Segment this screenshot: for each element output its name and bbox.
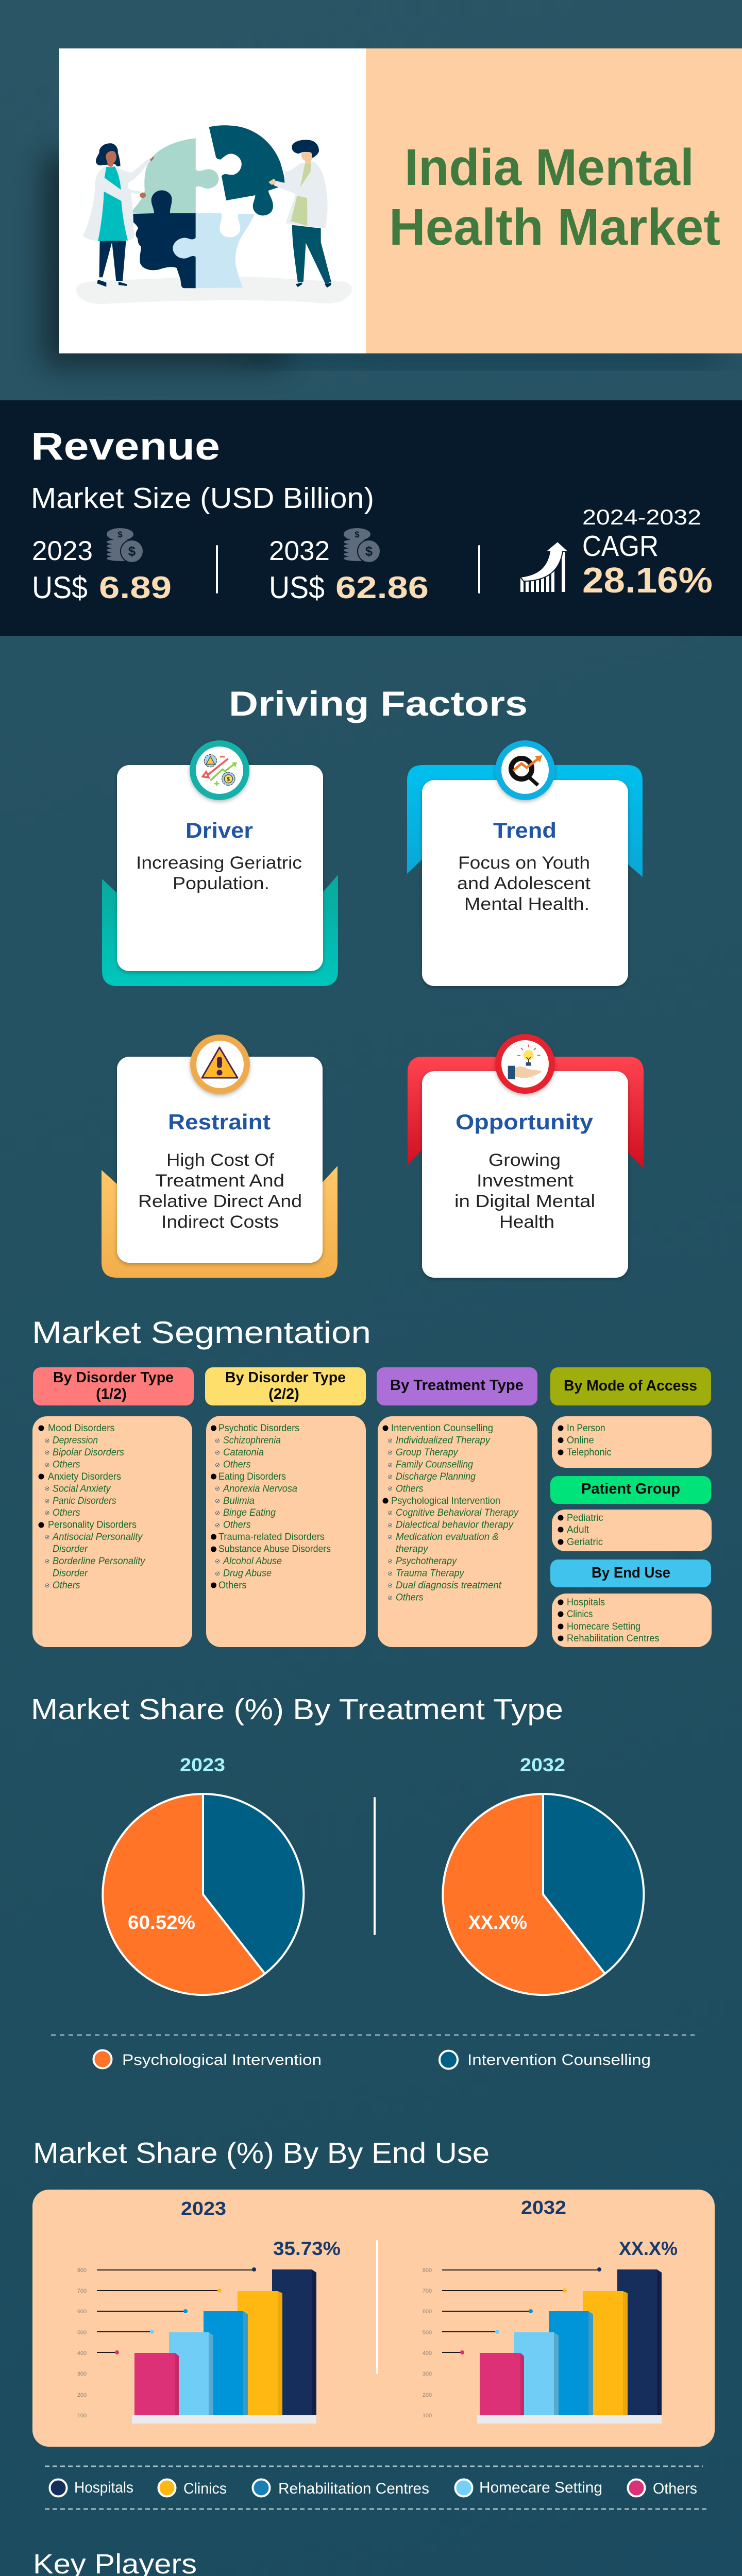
segment list [32, 1416, 192, 1647]
segment list: Others [53, 1580, 80, 1591]
bar chart: 2023: 600 [77, 2309, 87, 2315]
segment list: Pediatric [567, 1513, 603, 1523]
segment list: Adult [567, 1524, 589, 1535]
segment list: Mood Disorders [48, 1423, 114, 1434]
card text [454, 1150, 595, 1232]
segment list: Hospitals [567, 1597, 605, 1608]
bar chart: 2023: 200 [77, 2392, 87, 2398]
card text [138, 1150, 302, 1232]
segment list: Binge Eating [223, 1507, 276, 1518]
segment list: Geriatric [567, 1537, 603, 1548]
segment list [378, 1416, 537, 1647]
segment header [550, 1560, 711, 1587]
title: India Mental [404, 139, 694, 196]
segment list: Individualized Therapy [396, 1435, 491, 1446]
title [389, 139, 720, 256]
segment list [552, 1594, 712, 1647]
bar chart: 2032: 300 [423, 2371, 432, 2377]
stat: 2023 revenue: 6.89 [99, 570, 172, 605]
bar chart: 2032: 500 [423, 2330, 432, 2336]
stat: CAGR: 28.16% [582, 560, 713, 600]
bar chart: 2023: 100 [77, 2413, 87, 2419]
bar chart: 2023: 300 [77, 2371, 87, 2377]
segment list: Dual diagnosis treatment [396, 1580, 502, 1591]
panel: revenue [0, 400, 742, 636]
segment header [377, 1367, 537, 1405]
segment list: Disorder [53, 1568, 88, 1579]
segment list: Drug Abuse [223, 1568, 272, 1579]
bar chart: 2023 [77, 2198, 341, 2424]
segment header: Patient Group [581, 1481, 680, 1497]
segment list [206, 1416, 366, 1647]
heading: market share by treatment type: Market Share (%) By Treatment Type [31, 1693, 563, 1726]
segment header: (2/2) [268, 1386, 299, 1402]
illustration: people assembling a head puzzle [76, 125, 352, 304]
card text: Health [499, 1212, 554, 1232]
bar chart: 2032: 400 [423, 2350, 432, 2357]
icon: coins 2023: $ [128, 544, 136, 559]
segment list: Trauma Therapy [396, 1568, 465, 1579]
panel: patient group [550, 1476, 712, 1551]
segment list: Others [218, 1580, 246, 1591]
segment list: Cognitive Behavioral Therapy [396, 1507, 519, 1518]
card text: High Cost Of [166, 1150, 275, 1170]
stat: 2032 revenue: 62.86 [335, 570, 429, 605]
panel: driver [102, 740, 338, 986]
segment list: Discharge Planning [396, 1471, 476, 1482]
icon: coins 2023: $ [117, 530, 123, 539]
segment header [33, 1367, 194, 1405]
bar chart: 2023: 400 [77, 2350, 87, 2357]
icon: growth arrow and bars [520, 541, 569, 592]
pie chart: 2023 [103, 1754, 303, 1995]
segment list [552, 1510, 712, 1551]
segment list: Anxiety Disorders [48, 1471, 121, 1482]
card text: Investment [477, 1171, 574, 1191]
card text: Growing [488, 1150, 561, 1170]
divider [216, 545, 218, 594]
panel: opportunity [408, 1034, 644, 1278]
segment header: By Mode of Access [564, 1378, 697, 1394]
bar chart: 2032 [423, 2197, 678, 2424]
bar chart: 2032: 700 [423, 2288, 432, 2294]
stat: CAGR: 2024-2032 [582, 505, 701, 529]
panel: by disorder type 1/2 [32, 1367, 194, 1647]
segment list: Family Counselling [396, 1459, 473, 1470]
icon: driver gears and arrows [190, 740, 249, 800]
segment list: Antisocial Personality [52, 1532, 143, 1543]
stat: 2023 revenue: 2023 [32, 536, 93, 566]
stat: CAGR [582, 505, 713, 600]
segment list: Others [53, 1507, 80, 1518]
stat: 2032 revenue: 2032 [269, 536, 330, 566]
heading: market segmentation: Market Segmentation [32, 1315, 371, 1350]
segment list: Others [53, 1459, 80, 1470]
stat: 2032 revenue: US$ [269, 570, 325, 605]
bar chart: 2032: 600 [423, 2309, 432, 2315]
stat: 2023 revenue [32, 536, 172, 605]
icon: coins 2032: $ [355, 530, 360, 539]
heading: market share by end use: Market Share (%) By By End Use [33, 2137, 490, 2170]
heading: driving factors: Driving Factors [229, 684, 528, 723]
segment list: therapy [396, 1544, 429, 1555]
bar chart: 2023: 700 [77, 2288, 87, 2294]
legend: end use [49, 2479, 697, 2497]
segment header: By Treatment Type [390, 1377, 524, 1394]
segment list: In Person [567, 1423, 605, 1434]
legend: end use: Others [653, 2480, 697, 2497]
segment list: Catatonia [223, 1447, 264, 1458]
icon: warning triangle [190, 1035, 250, 1094]
pie chart: 2032: 2032 [520, 1754, 565, 1775]
segment header: By Disorder Type [225, 1369, 346, 1386]
bar chart: 2032: XX.X% [619, 2238, 678, 2259]
segment list: Trauma-related Disorders [218, 1532, 325, 1543]
segment list: Psychotherapy [396, 1556, 457, 1567]
bar chart: 2032: 100 [423, 2413, 432, 2419]
divider [376, 2240, 378, 2374]
panel: trend [407, 740, 643, 986]
legend: end use: Homecare Setting [479, 2479, 602, 2496]
card title: Restraint [168, 1110, 271, 1134]
segment list: Others [396, 1483, 424, 1494]
segment list: Others [223, 1459, 251, 1470]
heading: revenue: Revenue [31, 425, 220, 468]
segment header: By End Use [592, 1565, 670, 1581]
pie chart: 2023: 60.52% [128, 1912, 195, 1933]
segment list: Online [567, 1435, 594, 1446]
panel: by disorder type 2/2 [205, 1367, 366, 1647]
legend: treatment type: Psychological Intervention [122, 2052, 322, 2069]
panel: by mode of access [550, 1367, 712, 1468]
card title: Trend [493, 818, 556, 842]
card text: Increasing Geriatric [136, 853, 302, 873]
segment list: Homecare Setting [567, 1621, 640, 1632]
pie chart: 2023: 2023 [180, 1754, 225, 1775]
hero title panel [366, 48, 742, 353]
card text: Relative Direct And [138, 1192, 302, 1211]
segment list: Personality Disorders [48, 1520, 137, 1531]
segment list: Others [223, 1520, 251, 1531]
segment header [205, 1367, 366, 1405]
icon: coins 2032 [344, 528, 380, 563]
card text: Treatment And [155, 1171, 284, 1191]
bar chart: 2023: 2023 [181, 2198, 226, 2219]
pie chart: 2032 [443, 1754, 644, 1995]
icon: driver gears and arrows: $ [227, 776, 230, 782]
segment header: By Disorder Type [53, 1369, 174, 1386]
segment list: Dialectical behavior therapy [396, 1520, 514, 1531]
segment list: Panic Disorders [53, 1496, 116, 1506]
segment list: Bulimia [223, 1496, 255, 1506]
panel: end use charts [32, 2190, 715, 2447]
hero shadow [43, 155, 721, 366]
bar chart: 2032: 2032 [521, 2197, 566, 2218]
divider [374, 1797, 376, 1935]
segment list: Clinics [567, 1609, 593, 1620]
stat: CAGR: CAGR [582, 530, 659, 563]
segment header [550, 1476, 711, 1504]
hero banner [59, 48, 742, 353]
segment list: Intervention Counselling [391, 1423, 493, 1434]
card text: Population. [173, 874, 269, 893]
segment list: Eating Disorders [218, 1471, 286, 1482]
card text [457, 853, 591, 914]
card text: Mental Health. [464, 894, 589, 914]
segment list: Depression [53, 1435, 98, 1446]
segment list: Rehabilitation Centres [567, 1633, 660, 1644]
panel: by treatment type [377, 1367, 537, 1647]
title: Health Market [389, 198, 720, 256]
segment list: Medication evaluation & [396, 1532, 499, 1543]
segment list: Borderline Personality [53, 1556, 146, 1567]
card text: in Digital Mental [454, 1192, 595, 1211]
divider [478, 545, 480, 594]
segment list: Psychotic Disorders [218, 1423, 299, 1434]
stat: 2032 revenue [269, 536, 429, 605]
card title: Driver [185, 818, 253, 842]
panel: by end use [550, 1560, 712, 1647]
icon: trend magnifier [495, 740, 555, 800]
bar chart: 2032: 200 [423, 2392, 432, 2398]
segment header [550, 1367, 711, 1405]
card text: and Adolescent [457, 874, 591, 893]
bar chart: 2023: 500 [77, 2330, 87, 2336]
legend: end use: Hospitals [74, 2479, 133, 2496]
icon: coins 2032: $ [365, 544, 373, 559]
legend: end use: Rehabilitation Centres [278, 2480, 429, 2497]
bar chart: 2023: 800 [77, 2267, 87, 2274]
bar chart: 2032: 800 [423, 2267, 432, 2274]
segment header: (1/2) [96, 1386, 127, 1402]
segment list: Disorder [53, 1544, 88, 1555]
card title: Opportunity [456, 1110, 594, 1134]
stat: 2023 revenue: US$ [32, 570, 88, 605]
card text: Focus on Youth [458, 853, 590, 873]
segment list: Alcohol Abuse [223, 1556, 282, 1567]
pie chart: 2032: XX.X% [468, 1912, 527, 1933]
hero illustration panel [59, 48, 366, 353]
segment list [552, 1416, 712, 1468]
segment list: Group Therapy [396, 1447, 459, 1458]
panel: restraint [102, 1035, 338, 1278]
card text [136, 853, 302, 893]
legend: treatment type: Intervention Counselling [467, 2052, 651, 2069]
market size label: Market Size (USD Billion) [31, 482, 374, 515]
segment list: Others [396, 1592, 424, 1603]
segment list: Telephonic [567, 1447, 612, 1458]
segment list: Psychological Intervention [391, 1496, 500, 1506]
icon: coins 2023 [107, 528, 143, 563]
legend: treatment type [94, 2050, 651, 2069]
segment list: Schizophrenia [223, 1435, 281, 1446]
icon: hand with light bulb [495, 1034, 555, 1094]
segment list: Substance Abuse Disorders [218, 1544, 331, 1555]
legend: end use: Clinics [183, 2480, 227, 2497]
segment list: Anorexia Nervosa [223, 1483, 297, 1494]
card text: Indirect Costs [161, 1212, 279, 1232]
bar chart: 2023: 35.73% [273, 2238, 341, 2259]
segment list: Bipolar Disorders [53, 1447, 124, 1458]
segment list: Social Anxiety [53, 1483, 111, 1494]
